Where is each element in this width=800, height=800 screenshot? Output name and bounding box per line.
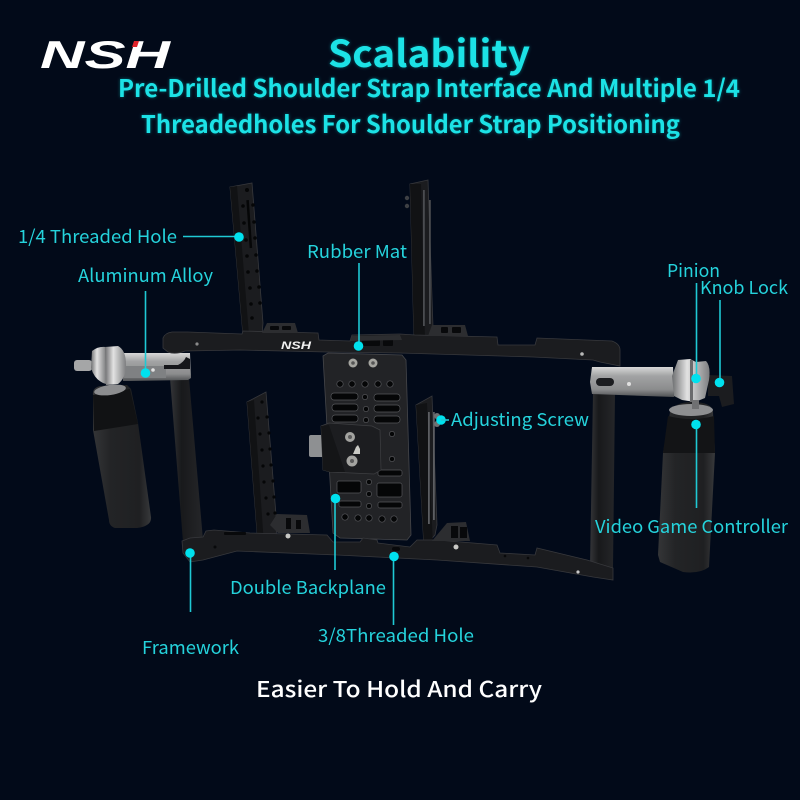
callout: video game controller (595, 420, 789, 539)
product: monitor cage rig (74, 180, 734, 580)
lower rear upright left (247, 392, 277, 545)
callout: rubber mat: Rubber Mat (307, 238, 407, 264)
top crossbar (163, 323, 620, 366)
callout: framework (142, 548, 239, 660)
left handle (93, 383, 151, 528)
lower rear upright right (416, 396, 440, 547)
callout: knob lock (700, 274, 788, 387)
caption: Easier To Hold And Carry (256, 672, 542, 704)
callout: pinion (667, 257, 720, 383)
right vertical column (590, 393, 615, 568)
right handle (658, 402, 715, 572)
title: Scalability (328, 24, 530, 78)
callout: pinion: Pinion (667, 257, 720, 283)
subtitle line 1: Pre-Drilled Shoulder Strap Interface And Multiple 1/4 (118, 69, 740, 104)
subtitle line 2: Threadedholes For Shoulder Strap Positioning (141, 105, 680, 140)
bottom crossbar (182, 514, 613, 580)
left vertical column (170, 378, 203, 542)
callout: knob lock: Knob Lock (700, 274, 788, 300)
battery plate on backplane (309, 423, 381, 474)
callout: 1/4 threaded hole: 1/4 Threaded Hole (18, 223, 177, 249)
right silver arm (590, 367, 674, 397)
double backplane (323, 353, 411, 540)
callout: double backplane: Double Backplane (230, 574, 386, 600)
callout: 3/8 threaded hole (318, 552, 474, 648)
callout: video game controller: Video Game Controller (595, 513, 789, 539)
logo: NSH (40, 34, 171, 77)
callout: aluminum alloy: Aluminum Alloy (78, 262, 214, 288)
callout: 3/8 threaded hole: 3/8Threaded Hole (318, 622, 474, 648)
right clamp ball and knob lock (672, 359, 734, 409)
left silver arm and clamp (74, 346, 191, 385)
callout: double backplane (230, 494, 386, 600)
callout: rubber mat (307, 238, 407, 351)
logo on crossbar: NSH (281, 340, 312, 352)
left rear upright (230, 183, 263, 335)
callout: aluminum alloy (78, 262, 214, 378)
right rear upright (405, 180, 433, 340)
callout: 1/4 threaded hole (18, 223, 244, 249)
logo: NSH: NSH (40, 34, 171, 77)
callout: framework: Framework (142, 634, 239, 660)
callout: adjusting screw: Adjusting Screw (451, 406, 589, 432)
